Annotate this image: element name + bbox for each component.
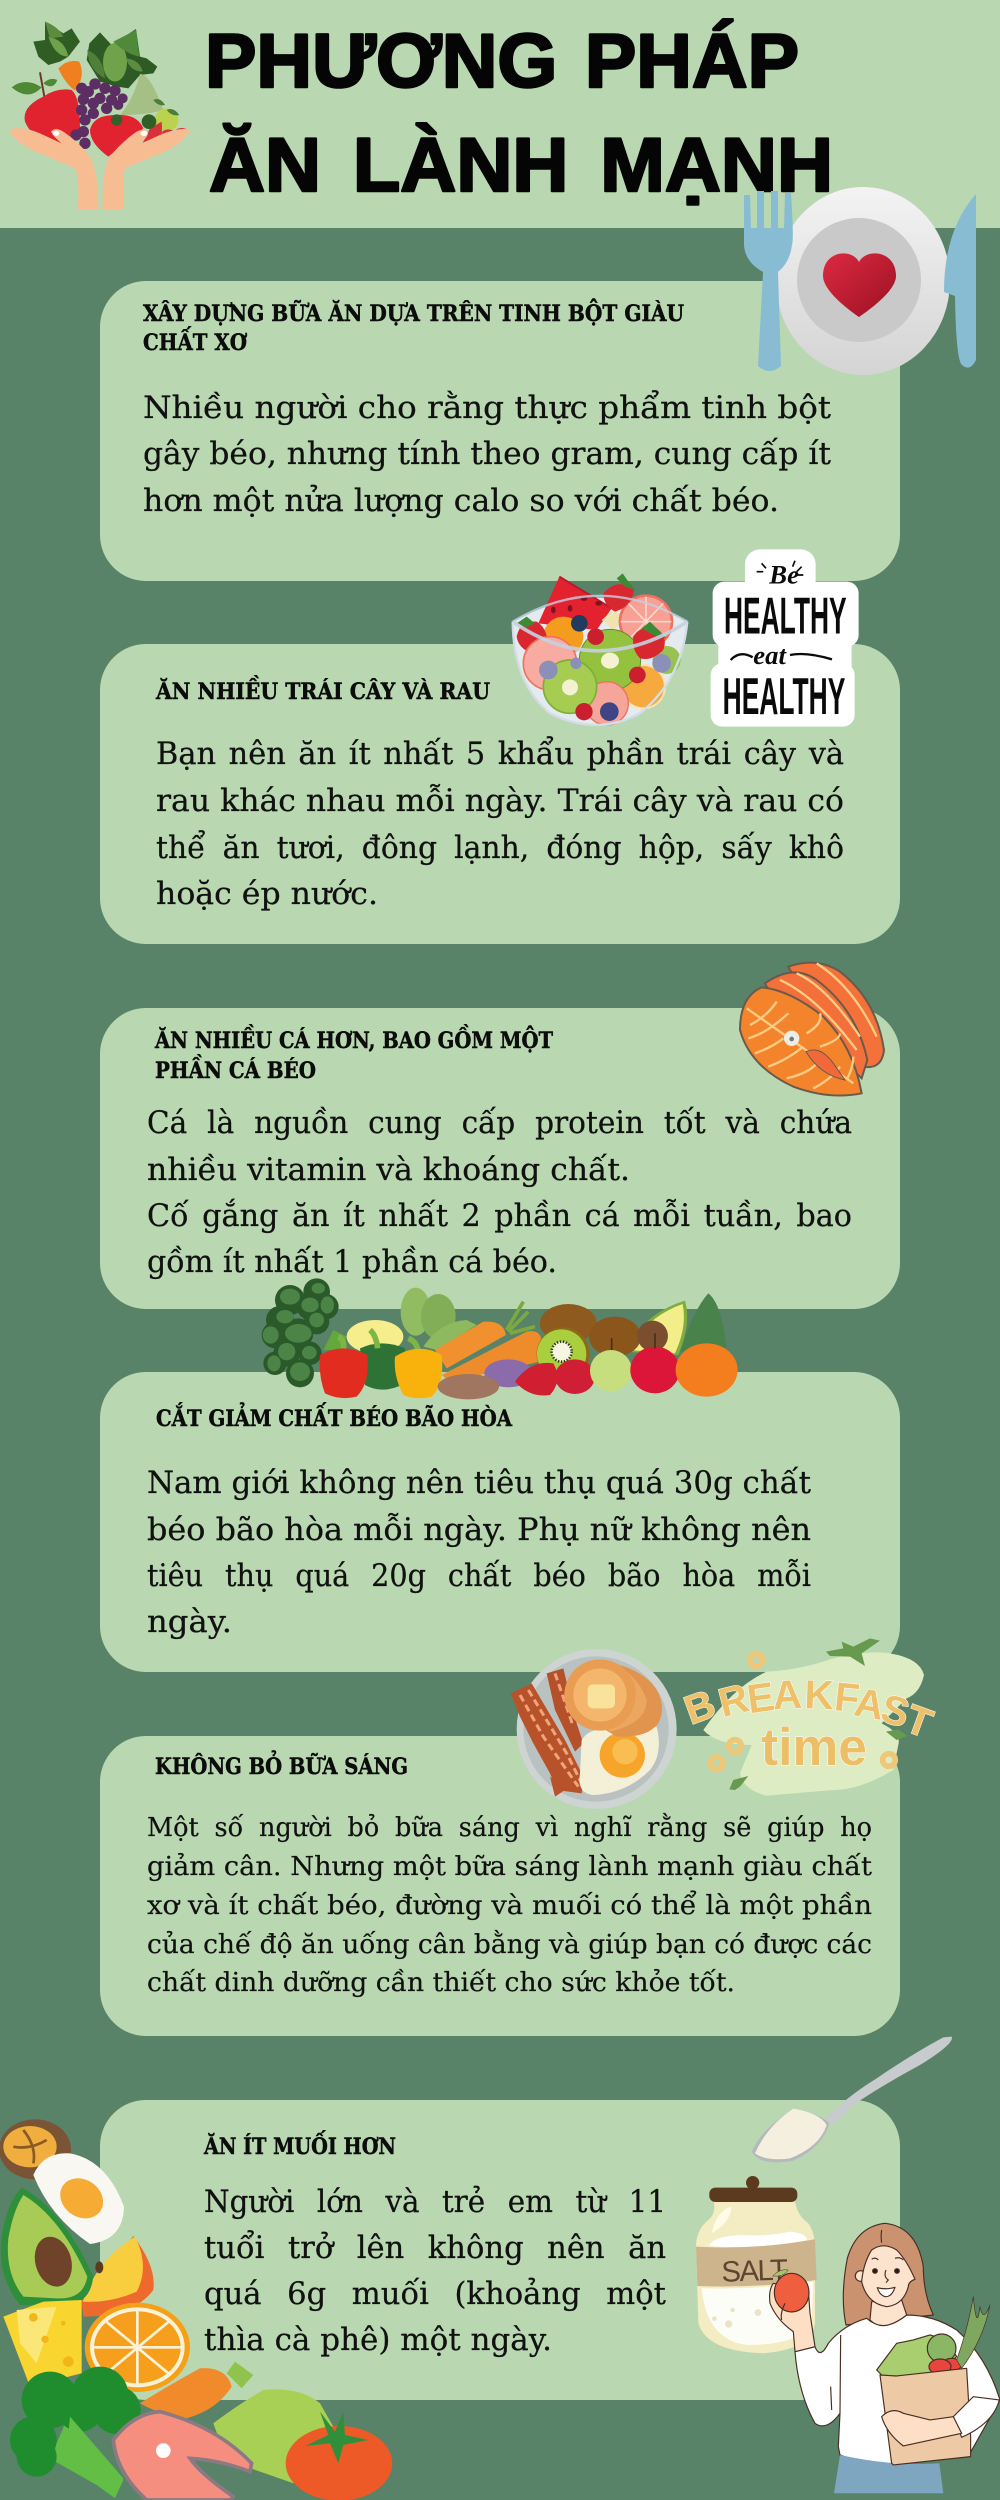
icon: fruit salad bowl xyxy=(513,573,687,725)
icon: broccoli xyxy=(10,2367,141,2498)
sticker: be healthy eat healthy: eat xyxy=(753,640,787,670)
text: card 5 body xyxy=(147,1812,872,1998)
sticker: breakfast time: time xyxy=(761,1718,867,1777)
sticker: breakfast time xyxy=(678,1638,939,1796)
icon: lettuce xyxy=(213,2389,333,2483)
sticker: be healthy eat healthy: HEALTHY xyxy=(724,586,847,644)
text: card 2 body xyxy=(156,735,844,912)
icon: cheese xyxy=(3,2300,82,2387)
text: card 2 body: rau khác nhau mỗi ngày. Trái cây và rau có xyxy=(156,782,844,819)
text: card 6 body: quá 6g muối (khoảng một xyxy=(204,2276,667,2312)
heading: card 4: CẮT GIẢM CHẤT BÉO BÃO HÒA xyxy=(156,1402,512,1432)
icon: salt jar xyxy=(696,2176,817,2353)
text: card 1 body xyxy=(143,389,832,519)
text: card 5 body: của chế độ ăn uống cân bằng và giúp bạn có được các xyxy=(147,1929,872,1960)
text: card 1 body: hơn một nửa lượng calo so với chất béo. xyxy=(143,483,779,519)
panel: card 2 xyxy=(100,644,900,944)
text: card 3 body: Cá là nguồn cung cấp protein tốt và chứa xyxy=(147,1105,852,1141)
text: card 3 body: Cố gắng ăn ít nhất 2 phần cá mỗi tuần, bao xyxy=(147,1197,852,1234)
text: card 2 body: hoặc ép nước. xyxy=(156,876,378,912)
heading: card 5: KHÔNG BỎ BỮA SÁNG xyxy=(155,1750,408,1780)
icon: salmon steak xyxy=(113,2412,252,2500)
sticker: be healthy eat healthy: HEALTHY xyxy=(723,667,845,725)
text: card 1 body: gây béo, nhưng tính theo gram, cung cấp ít xyxy=(143,436,832,472)
sticker: be healthy eat healthy xyxy=(711,549,859,727)
text: card 4 body: tiêu thụ quá 20g chất béo bão hòa mỗi xyxy=(147,1557,811,1594)
icon: hands holding fruit xyxy=(9,22,191,209)
text: card 6 body xyxy=(204,2184,667,2358)
icon: breakfast plate xyxy=(511,1649,677,1809)
icon: orange slice xyxy=(85,2303,190,2392)
text: card 4 body xyxy=(147,1465,812,1640)
heading: card 3 xyxy=(154,1024,553,1084)
title: ĂN LÀNH MẠNH xyxy=(209,123,833,208)
panel: card 5 xyxy=(100,1736,900,2036)
heading: card 3: ĂN NHIỀU CÁ HƠN, BAO GỒM MỘT xyxy=(154,1024,553,1054)
text: card 6 body: tuổi trở lên không nên ăn xyxy=(204,2229,666,2266)
text: card 5 body: Một số người bỏ bữa sáng vì nghĩ rằng sẽ giúp họ xyxy=(147,1812,872,1843)
icon: salt jar: SALT xyxy=(721,2253,789,2289)
heading: card 1 xyxy=(143,299,684,356)
icon: walnut xyxy=(0,2119,71,2179)
heading: card 1: CHẤT XƠ xyxy=(143,326,247,356)
text: card 2 body: Bạn nên ăn ít nhất 5 khẩu phần trái cây và xyxy=(156,735,844,772)
text: card 4 body: ngày. xyxy=(147,1604,232,1640)
icon: boiled egg xyxy=(33,2153,124,2244)
heading: card 3: PHẦN CÁ BÉO xyxy=(155,1054,316,1084)
title: PHƯƠNG PHÁP xyxy=(205,19,799,104)
icon: plate with fork and knife xyxy=(744,187,976,375)
text: card 2 body: thể ăn tươi, đông lạnh, đóng hộp, sấy khô xyxy=(156,829,844,866)
text: card 5 body: xơ và ít chất béo, đường và muối có thể là một phần xyxy=(147,1890,872,1921)
icon: salmon steaks xyxy=(740,963,884,1096)
illustration: food pile left xyxy=(0,2119,392,2500)
illustration: woman with grocery bag xyxy=(770,2223,1000,2493)
heading: card 2: ĂN NHIỀU TRÁI CÂY VÀ RAU xyxy=(155,675,490,705)
text: card 3 body xyxy=(147,1105,852,1280)
title xyxy=(205,19,833,208)
icon: tomato xyxy=(286,2412,392,2500)
text: card 4 body: Nam giới không nên tiêu thụ quá 30g chất xyxy=(147,1465,812,1501)
text: card 5 body: giảm cân. Nhưng một bữa sáng lành mạnh giàu chất xyxy=(147,1851,872,1882)
panel: card 4 xyxy=(100,1372,900,1672)
heading: card 1: XÂY DỰNG BỮA ĂN DỰA TRÊN TINH BỘT GIÀU xyxy=(143,299,684,327)
text: card 3 body: gồm ít nhất 1 phần cá béo. xyxy=(147,1244,557,1280)
icon: vegetable and fruit row xyxy=(262,1278,738,1399)
panel: card 1 xyxy=(100,281,900,581)
icon: carrot xyxy=(140,2362,253,2418)
text: card 1 body: Nhiều người cho rằng thực phẩm tinh bột xyxy=(143,389,832,426)
header band xyxy=(0,0,1000,228)
sticker: be healthy eat healthy: Be xyxy=(768,559,799,589)
text: card 3 body: nhiều vitamin và khoáng chất. xyxy=(147,1152,630,1188)
panel: card 6 xyxy=(100,2100,900,2400)
icon: spoon with salt xyxy=(752,2037,952,2162)
icon: avocado xyxy=(1,2187,93,2305)
sticker: breakfast time: BREAKFAST xyxy=(678,1671,939,1747)
text: card 6 body: thìa cà phê) một ngày. xyxy=(204,2322,552,2358)
text: card 6 body: Người lớn và trẻ em từ 11 xyxy=(204,2184,666,2220)
panel: card 3 xyxy=(100,1008,900,1309)
icon: peach xyxy=(82,2236,154,2317)
text: card 4 body: béo bão hòa mỗi ngày. Phụ nữ không nên xyxy=(147,1511,811,1548)
heading: card 6: ĂN ÍT MUỐI HƠN xyxy=(203,2130,396,2160)
text: card 5 body: chất dinh dưỡng cần thiết cho sức khỏe tốt. xyxy=(147,1967,735,1998)
